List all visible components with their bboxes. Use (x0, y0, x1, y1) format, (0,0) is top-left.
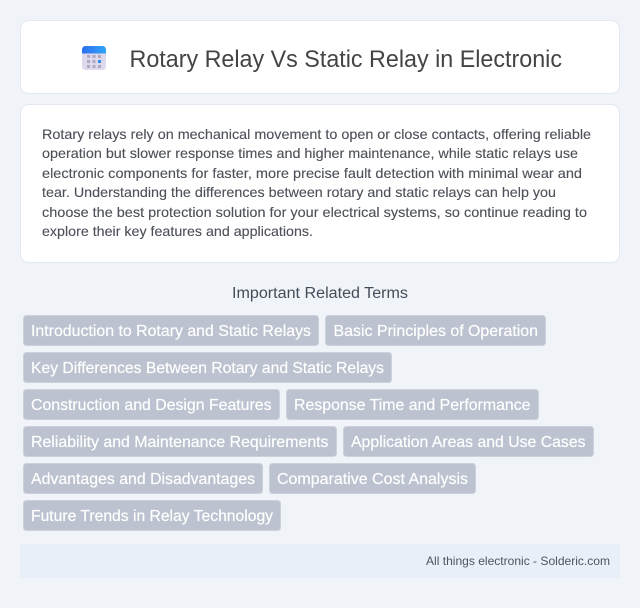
text block: intro paragraph: tear. Understanding the differences between rotary and static relays can help you (42, 184, 556, 200)
text block: intro paragraph: electronic components for faster, more precise fault detection with minimal wear and (42, 165, 582, 181)
footer (20, 544, 620, 578)
chip: cost analysis: Comparative Cost Analysis (277, 471, 468, 488)
chip: response time (286, 390, 538, 420)
heading: related terms: Important Related Terms (232, 285, 408, 302)
chip: basic principles (326, 316, 546, 346)
panel: term chips (24, 316, 594, 530)
text block: intro paragraph: choose the best protection solution for your electrical systems, so continue reading to (42, 204, 587, 220)
text block: intro paragraph: operation but slower response times and higher maintenance, while static relays use (42, 145, 578, 161)
chip: reliability (24, 426, 336, 456)
chip: introduction (24, 316, 318, 346)
panel: intro description (20, 104, 620, 262)
panel: title card (20, 20, 620, 94)
chip: advantages (24, 464, 262, 494)
chip: future trends (24, 500, 280, 530)
text block: intro paragraph (42, 126, 591, 239)
chip: cost analysis (270, 464, 476, 494)
chip: response time: Response Time and Performance (294, 397, 531, 414)
icon: calendar grid (82, 46, 106, 70)
title: Rotary Relay Vs Static Relay in Electronic (130, 46, 562, 73)
chip: construction: Construction and Design Features (31, 397, 272, 414)
chip: application areas: Application Areas and Use Cases (351, 434, 586, 451)
chip: application areas (344, 426, 594, 456)
chip: future trends: Future Trends in Relay Technology (31, 508, 273, 525)
chip: key differences (24, 352, 392, 382)
chip: construction (24, 390, 280, 420)
chip: basic principles: Basic Principles of Operation (334, 323, 538, 340)
chip: reliability: Reliability and Maintenance Requirements (31, 434, 328, 451)
text block: intro paragraph: Rotary relays rely on mechanical movement to open or close contacts, offering reliable (42, 126, 591, 142)
chip: advantages: Advantages and Disadvantages (31, 471, 255, 488)
text block: intro paragraph: explore their key features and applications. (42, 223, 313, 239)
chip: introduction: Introduction to Rotary and Static Relays (31, 323, 311, 340)
footer: All things electronic - Solderic.com (426, 554, 610, 568)
chip: key differences: Key Differences Between Rotary and Static Relays (31, 360, 384, 377)
